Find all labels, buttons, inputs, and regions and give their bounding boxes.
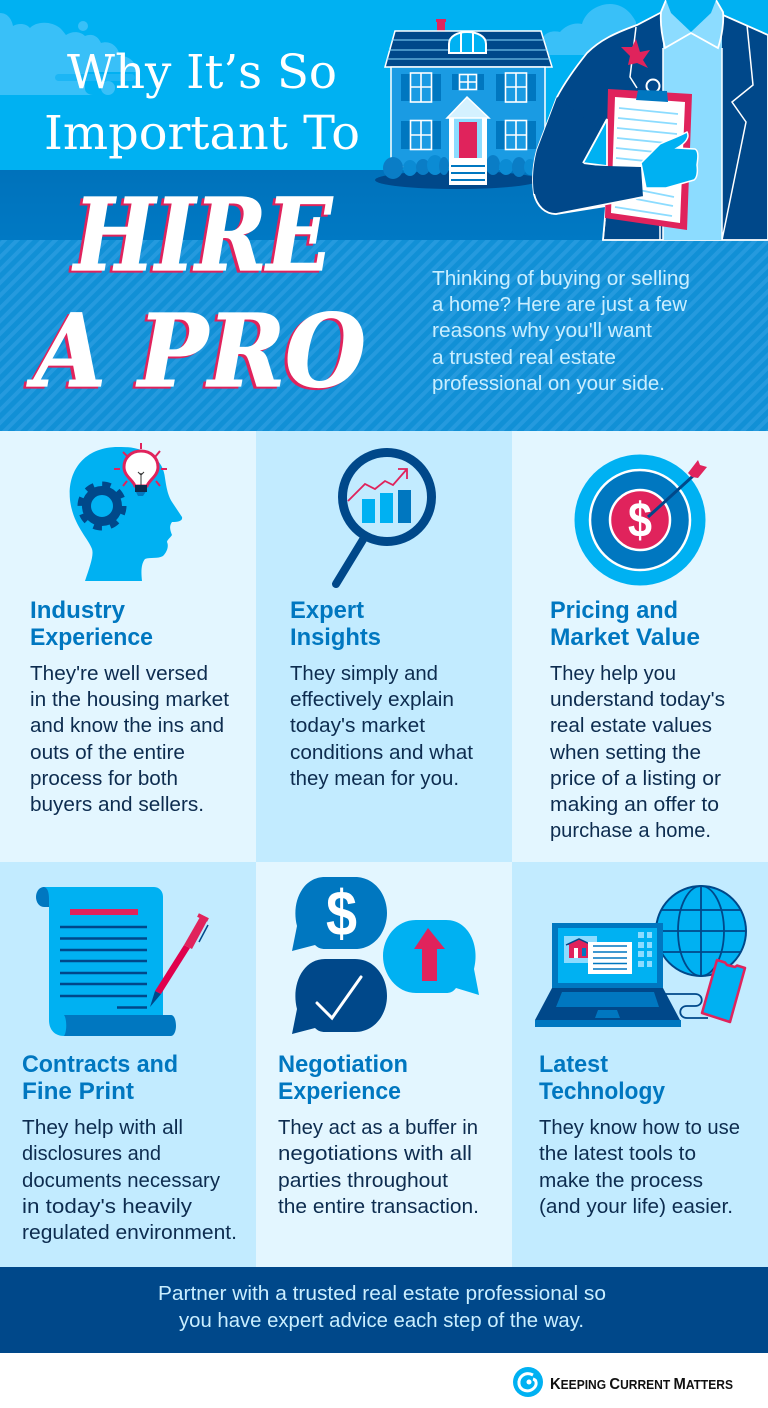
header panel background	[0, 0, 768, 431]
text: pricing and market value	[549, 663, 725, 842]
icon: up arrow speech bubble	[383, 920, 479, 995]
text: expert insights: today's market	[290, 715, 425, 737]
title: hire a pro: A PRO	[27, 292, 366, 410]
heading: pricing and market value	[550, 597, 700, 651]
heading: pricing and market value: Market Value	[550, 624, 700, 651]
text: latest technology: the latest tools to	[539, 1143, 696, 1165]
heading: contracts and fine print: Contracts and	[22, 1051, 178, 1078]
text: contracts and fine print: regulated environment.	[22, 1222, 237, 1244]
text: expert insights: effectively explain	[290, 689, 454, 711]
text: industry experience: and know the ins and	[30, 715, 224, 737]
text: pricing and market value: real estate values	[550, 715, 712, 737]
title: hire a pro	[24, 176, 366, 412]
panel: pricing and market value	[512, 431, 768, 862]
text: contracts and fine print: disclosures and	[22, 1143, 161, 1165]
cloud left	[0, 13, 138, 95]
icon: dollar speech bubble: $	[326, 877, 357, 949]
text: pricing and market value: price of a listing or	[550, 768, 721, 790]
text: expert insights	[290, 663, 473, 790]
panel: expert insights	[256, 431, 512, 862]
text: expert insights: conditions and what	[290, 742, 473, 764]
panel: negotiation experience	[256, 862, 512, 1267]
text: pricing and market value: when setting the	[549, 742, 701, 764]
text: expert insights: They simply and	[290, 663, 438, 685]
heading: industry experience: Experience	[30, 624, 153, 651]
icon: target with dollar and dart	[574, 454, 707, 586]
text: contracts and fine print: in today's heavily	[22, 1196, 192, 1218]
intro paragraph: Thinking of buying or selling	[432, 268, 690, 290]
footer call to action band: Partner with a trusted real estate professional so	[158, 1283, 606, 1305]
text: negotiation experience: negotiations with all	[278, 1143, 472, 1165]
heading: industry experience	[30, 597, 153, 651]
intro paragraph: a home? Here are just a few	[432, 294, 688, 316]
text: pricing and market value: They help you	[550, 663, 676, 685]
heading: negotiation experience: Experience	[278, 1078, 401, 1105]
title: hire a pro: A PRO	[24, 294, 363, 412]
text: industry experience: outs of the entire	[30, 742, 185, 764]
heading: contracts and fine print	[22, 1051, 178, 1105]
heading: negotiation experience: Negotiation	[278, 1051, 408, 1078]
text: industry experience	[30, 663, 229, 816]
heading: expert insights: Expert	[290, 597, 364, 624]
heading: pricing and market value: Pricing and	[550, 597, 678, 624]
text: negotiation experience: parties throughout	[278, 1170, 448, 1192]
house illustration	[375, 19, 552, 189]
intro paragraph	[432, 268, 690, 395]
panel: contracts and fine print	[0, 862, 256, 1267]
text: contracts and fine print: documents necessary	[22, 1170, 220, 1192]
panel: industry experience	[0, 431, 256, 862]
text: negotiation experience: They act as a buffer in	[278, 1117, 478, 1139]
text: pricing and market value: making an offer to	[550, 794, 719, 816]
heading: latest technology: Latest	[539, 1051, 608, 1078]
heading: expert insights: Insights	[290, 624, 381, 651]
heading: latest technology: Technology	[539, 1078, 666, 1105]
text: expert insights: they mean for you.	[290, 768, 459, 790]
text: contracts and fine print	[22, 1117, 237, 1244]
logo: keeping current matters	[513, 1367, 733, 1397]
text: industry experience: They're well versed	[30, 663, 208, 685]
icon: globe, laptop and phone	[535, 886, 746, 1027]
text: pricing and market value: understand today's	[550, 689, 725, 711]
heading: latest technology	[539, 1051, 666, 1105]
heading: industry experience: Industry	[30, 597, 126, 624]
cloud right	[543, 4, 636, 55]
icon: dollar speech bubble	[292, 877, 387, 951]
intro paragraph: a trusted real estate	[432, 347, 616, 369]
heading: expert insights	[290, 597, 381, 651]
text: latest technology	[539, 1117, 740, 1218]
text: latest technology: (and your life) easier.	[539, 1196, 733, 1218]
heading: negotiation experience	[278, 1051, 408, 1105]
icon: magnifying glass with chart	[336, 452, 432, 584]
footer call to action band	[0, 1267, 768, 1353]
text: pricing and market value: purchase a home.	[550, 820, 711, 842]
footer call to action band: you have expert advice each step of the way.	[179, 1310, 584, 1332]
icon: check mark speech bubble	[292, 959, 387, 1034]
text: industry experience: buyers and sellers.	[30, 794, 204, 816]
title: hire a pro: HIRE	[68, 178, 331, 296]
heading: contracts and fine print: Fine Print	[22, 1078, 134, 1105]
text: industry experience: in the housing market	[30, 689, 229, 711]
title: why it's so important to: Why It’s So	[67, 45, 337, 100]
real estate professional with clipboard	[533, 0, 768, 240]
title: hire a pro: HIRE	[71, 176, 334, 294]
title: why it's so important to: Important To	[44, 106, 360, 161]
intro paragraph: professional on your side.	[432, 373, 665, 395]
text: contracts and fine print: They help with all	[22, 1117, 183, 1139]
text: latest technology: make the process	[539, 1170, 703, 1192]
panel: latest technology	[512, 862, 768, 1267]
title: why it's so important to	[44, 45, 360, 161]
text: negotiation experience	[278, 1117, 479, 1218]
intro paragraph: reasons why you'll want	[432, 320, 652, 342]
icon: scroll contract and pen	[36, 887, 208, 1036]
icon: head with gear and light bulb	[70, 443, 182, 581]
icon: target with dollar and dart: $	[628, 494, 652, 548]
text: industry experience: process for both	[30, 768, 178, 790]
text: latest technology: They know how to use	[539, 1117, 740, 1139]
logo: keeping current matters: KEEPING CURRENT MATTERS	[550, 1376, 733, 1393]
text: negotiation experience: the entire transaction.	[278, 1196, 479, 1218]
